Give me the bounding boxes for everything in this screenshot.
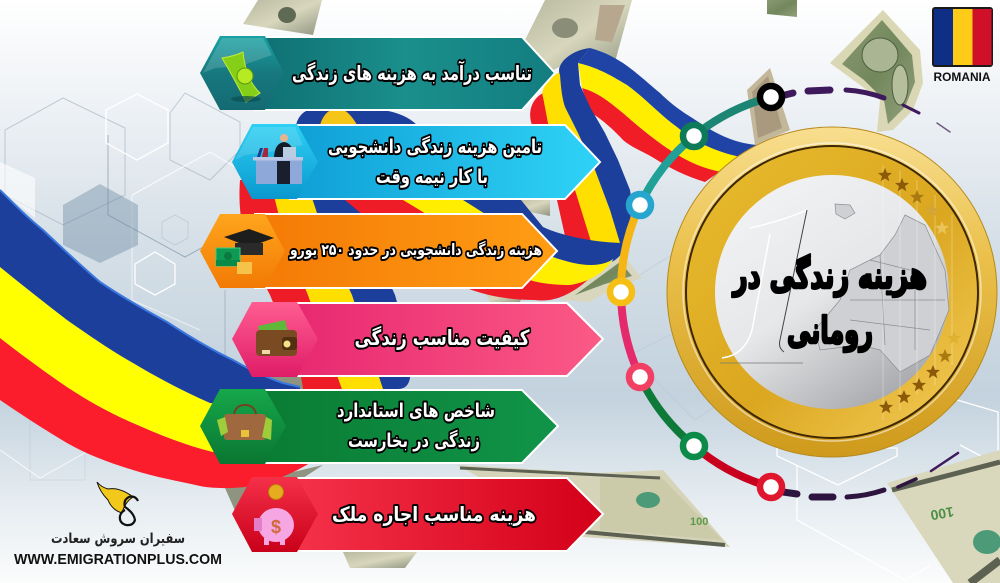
hexagon pattern background xyxy=(0,93,850,480)
bill: small top xyxy=(767,0,797,17)
stars stripes xyxy=(883,165,952,420)
bill: bottom right: 100 xyxy=(929,504,955,524)
stars xyxy=(878,168,961,413)
banner 5: standard indexes xyxy=(200,389,558,464)
bill: bottom right xyxy=(887,450,1000,583)
text: هزینه زندگی دانشجویی در حدود ۲۵۰ یورو xyxy=(289,240,542,259)
text: کیفیت مناسب زندگی xyxy=(354,325,530,350)
coin xyxy=(667,127,997,457)
bill: under banner 4 xyxy=(270,377,303,389)
banner 3: student cost xyxy=(200,214,557,288)
bill: bottom center xyxy=(343,552,417,568)
hexagon icon: piggy bank: $ xyxy=(271,517,281,537)
dollar bills xyxy=(225,0,1000,583)
hexagon icon: wallet xyxy=(232,302,318,377)
bill: below banner 2 xyxy=(507,200,550,216)
bill: bottom left of center: 100 xyxy=(690,516,708,528)
numeral one xyxy=(720,210,807,363)
text: هزینه مناسب اجاره ملک xyxy=(332,502,536,526)
dashed extension top xyxy=(781,90,950,132)
hexagon icon: man at desk xyxy=(232,124,318,199)
text: تامین هزینه زندگی دانشجویی xyxy=(328,135,542,158)
ribbon: top right band xyxy=(578,48,757,182)
banner 5: standard indexes: زندگی در بخارست xyxy=(348,429,480,452)
website: WWW.EMIGRATIONPLUS.COM xyxy=(14,551,222,568)
icon: bird xyxy=(97,482,138,525)
banner 6: rent xyxy=(232,477,603,552)
text: شاخص های استاندارد xyxy=(337,400,495,422)
bill: below banner 3 xyxy=(483,288,525,302)
ribbon: diagonal sweep xyxy=(345,200,622,300)
ribbon: left band xyxy=(0,190,310,488)
bill: under banner 6 left xyxy=(225,465,323,522)
banner 2: student job: با کار نیمه وقت xyxy=(376,166,488,188)
ribbon: vertical blue strip xyxy=(559,48,631,262)
bill: top right xyxy=(525,0,632,72)
bill: top center xyxy=(243,0,322,35)
translucent hexagon xyxy=(63,184,138,263)
coin: رومانی xyxy=(787,309,873,352)
hexagon icon: piggy bank xyxy=(232,477,318,552)
flag label: ROMANIA xyxy=(934,72,990,84)
hexagon icon: graduation cap xyxy=(200,214,285,288)
banner 1: income ratio xyxy=(200,36,555,110)
banner 4: quality of life xyxy=(232,302,603,377)
hexagon icon: money xyxy=(200,36,284,110)
ribbon: right vertical loop xyxy=(530,72,622,248)
flag: Romania xyxy=(932,7,993,84)
bill: right of banner 3 xyxy=(560,252,642,302)
bill: green curled xyxy=(830,10,923,132)
logo xyxy=(14,482,222,568)
bill: bottom left of center xyxy=(457,465,730,547)
europe map xyxy=(815,204,949,372)
timeline nodes xyxy=(610,86,782,498)
bill: behind coin xyxy=(747,68,790,145)
dashed extension bottom xyxy=(783,453,958,497)
white hexagons xyxy=(106,94,998,580)
banner 2: student job xyxy=(232,124,600,199)
ribbon: central arch xyxy=(239,108,520,389)
timeline arc xyxy=(621,90,958,497)
persian company name: سفیران سروش سعادت xyxy=(51,531,185,547)
text: تناسب درآمد به هزینه های زندگی xyxy=(292,60,532,85)
hexagon icon: briefcase xyxy=(200,389,286,464)
